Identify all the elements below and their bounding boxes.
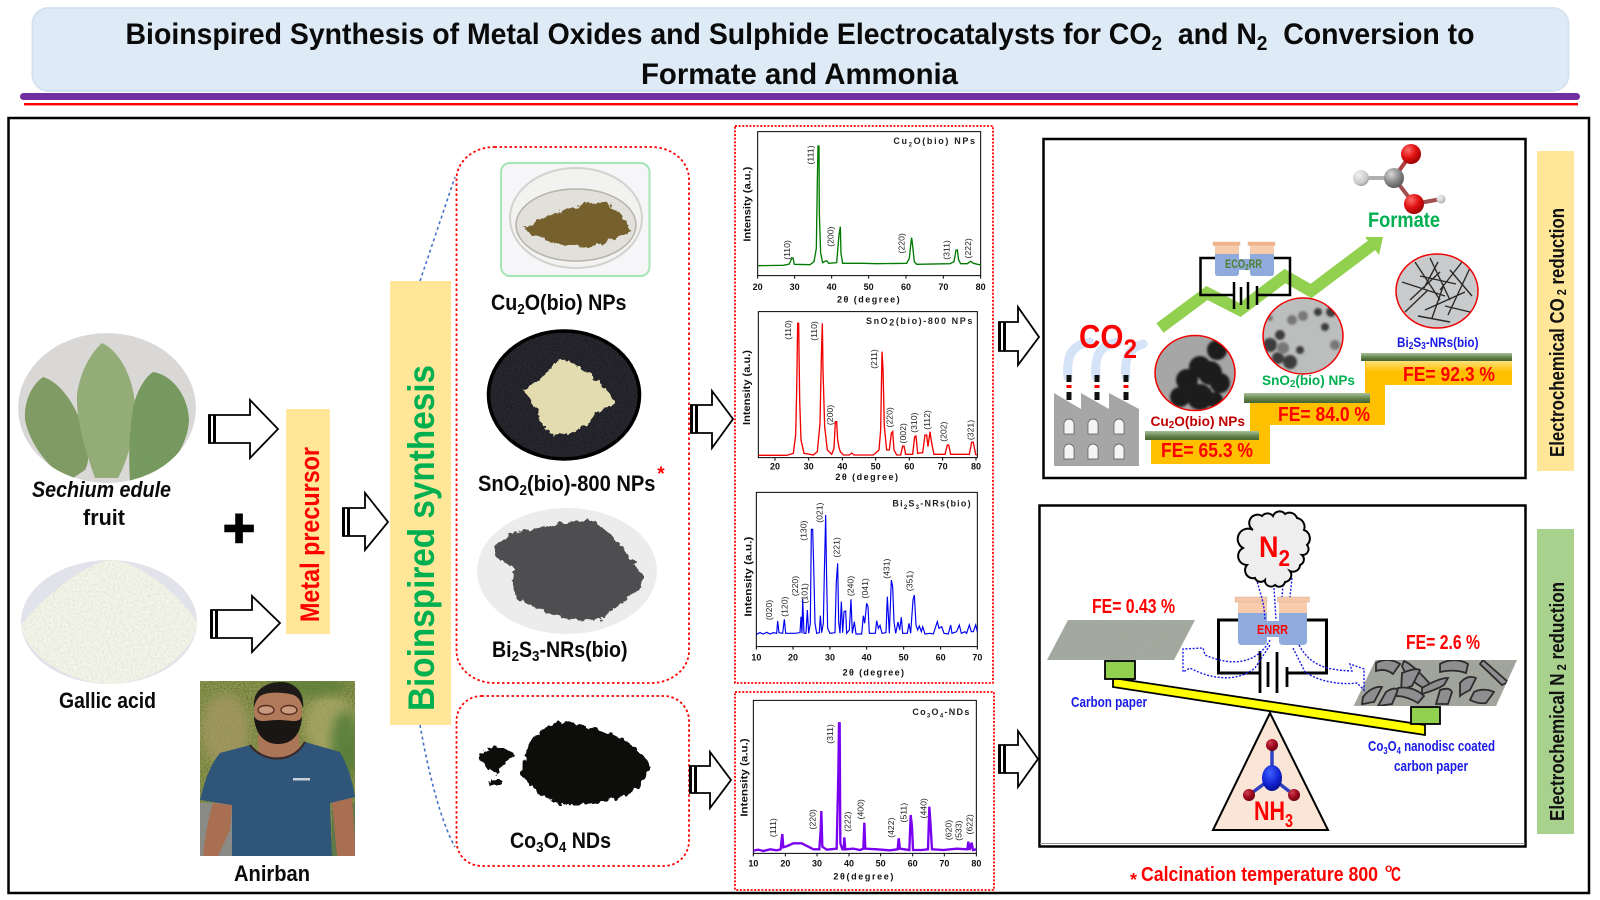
x axis title: 2θ (degree) bbox=[837, 294, 900, 304]
peak labels: (511) bbox=[899, 803, 909, 822]
arrow: rising green zigzag bbox=[1160, 237, 1383, 328]
label: Co3O4 NDs: O bbox=[544, 828, 559, 853]
plus sign: + bbox=[222, 496, 254, 559]
peak labels: (321) bbox=[966, 420, 976, 440]
arrow: precursor to synthesis bbox=[343, 493, 388, 550]
chart: Bi2S3 XRD bbox=[744, 492, 982, 678]
arrow: XRD to N2 reduction bbox=[999, 731, 1038, 787]
peak labels: (221) bbox=[832, 537, 842, 557]
label: Bi2S3-NRs(bio): 3 bbox=[532, 648, 539, 665]
TEM image: Cu2O bbox=[1154, 334, 1236, 412]
peak labels: (240) bbox=[845, 576, 855, 596]
footnote: calcination temperature: o bbox=[1385, 861, 1392, 875]
x tick labels: 30 bbox=[812, 859, 822, 869]
x tick labels: 30 bbox=[825, 653, 835, 663]
molecule: formate bbox=[1353, 144, 1446, 214]
peak labels: (311) bbox=[825, 724, 835, 744]
label: Sechium edule: Sechium edule bbox=[32, 477, 171, 502]
side label: Electrochemical N2 reduction bbox=[1537, 529, 1574, 834]
label: Bi2S3-NRs(bio): Bi bbox=[492, 637, 514, 662]
label: CO2: CO bbox=[1079, 318, 1128, 355]
peak labels: (220) bbox=[885, 407, 895, 427]
arrow: gallic acid to precursor bbox=[211, 596, 280, 652]
arrow: XRD to CO2 reduction bbox=[999, 307, 1039, 365]
peak labels: (130) bbox=[798, 520, 808, 541]
x tick labels bbox=[770, 461, 981, 471]
peak labels: (112) bbox=[922, 410, 932, 430]
peak labels: (120) bbox=[780, 596, 790, 617]
chart title: 3 bbox=[927, 713, 931, 719]
image: Bi2S3 powder bbox=[477, 508, 657, 634]
x tick labels: 70 bbox=[938, 282, 948, 292]
label: Co3O4 NDs: 3 bbox=[536, 839, 544, 856]
image: Sechium edule fruit bbox=[18, 333, 196, 483]
peak labels: (200) bbox=[826, 226, 836, 247]
image: Co3O4 nanodisc coated carbon paper bbox=[1354, 660, 1517, 706]
label: Bi2S3-NRs(bio) blue: Bi bbox=[1397, 334, 1411, 350]
label: Co3O4 nanodisc coated carbon paper: 4 bbox=[1397, 746, 1401, 757]
label: NH3: NH bbox=[1254, 796, 1293, 826]
side label: Electrochemical CO2 reduction bbox=[1537, 151, 1574, 471]
peak labels: (220) bbox=[790, 576, 800, 596]
x tick labels: 40 bbox=[844, 859, 854, 869]
chart title: (bio)-800 NPs bbox=[896, 316, 972, 326]
x tick labels: 30 bbox=[804, 461, 814, 471]
x axis title: 2θ (degree) bbox=[835, 472, 898, 482]
label: SnO2(bio)-800 NPs: (bio)-800 NPs bbox=[527, 471, 656, 496]
box: Bioinspired synthesis bbox=[390, 281, 451, 725]
peak labels: (620) bbox=[943, 820, 953, 840]
label: Co3O4 nanodisc coated carbon paper: 3 bbox=[1383, 746, 1388, 757]
title line 2: Formate and Ammonia bbox=[641, 58, 958, 91]
connector: dotted lines to material panels bbox=[420, 177, 455, 847]
y axis label: Intensity (a.u.) bbox=[740, 738, 751, 817]
peak labels: (041) bbox=[860, 578, 870, 598]
label: Cu2O(bio) NPs red: Cu bbox=[1150, 413, 1169, 429]
marker: red asterisk: * bbox=[657, 464, 665, 485]
label: Bi2S3-NRs(bio): 2 bbox=[512, 648, 519, 665]
x tick labels: 70 bbox=[939, 859, 949, 869]
y axis label: Intensity (a.u.) bbox=[742, 350, 753, 425]
box: Metal precursor: Metal precursor bbox=[295, 447, 325, 622]
label: Bi2S3-NRs(bio): -NRs(bio) bbox=[539, 637, 628, 662]
peak labels: (440) bbox=[918, 798, 928, 818]
label: Co3O4 NDs: NDs bbox=[566, 828, 611, 853]
panel: N2 electroreduction bbox=[1040, 506, 1526, 846]
x tick labels: 50 bbox=[864, 282, 874, 292]
x tick labels: 80 bbox=[971, 859, 981, 869]
footnote: calcination temperature: C bbox=[1391, 864, 1401, 886]
panel: CO2 electroreduction bbox=[1044, 139, 1526, 478]
panel: XRD chart Co3O4 frame bbox=[735, 692, 994, 890]
chart title: 2 bbox=[889, 318, 894, 328]
panel: XRD charts group bbox=[735, 126, 993, 683]
x axis title: 2θ(degree) bbox=[833, 871, 893, 881]
label: Gallic acid: Gallic acid bbox=[59, 688, 156, 713]
chart title: Bi bbox=[892, 499, 903, 509]
label: Co3O4 NDs: 4 bbox=[559, 839, 567, 856]
panel: Co3O4 nanodiscs bbox=[456, 696, 689, 866]
side label: Electrochemical N2 reduction: Electrochemical N bbox=[1547, 648, 1569, 821]
label: NH3: 3 bbox=[1285, 811, 1293, 831]
label: ECO2RR: RR bbox=[1249, 257, 1262, 271]
label: FE 84.0 %: FE= 84.0 % bbox=[1278, 404, 1370, 426]
peak labels: (111) bbox=[768, 818, 778, 837]
side label: Electrochemical N2 reduction: reduction bbox=[1547, 582, 1569, 664]
TEM image: Bi2S3 bbox=[1395, 252, 1481, 330]
peak labels: (311) bbox=[941, 240, 951, 260]
peak labels: (220) bbox=[808, 809, 818, 829]
chart title: 4 bbox=[940, 713, 944, 719]
label: Co3O4 nanodisc coated carbon paper: O bbox=[1388, 738, 1397, 755]
peak labels: (200) bbox=[825, 405, 835, 425]
arrow: nanoparticles to XRD bbox=[691, 391, 733, 448]
x tick labels: 70 bbox=[938, 461, 948, 471]
label: Co3O4 nanodisc coated carbon paper: Co bbox=[1368, 738, 1388, 755]
peak labels: (020) bbox=[764, 600, 774, 620]
photo: Anirban bbox=[200, 676, 359, 856]
chart title: SnO bbox=[866, 316, 888, 326]
x tick labels: 20 bbox=[753, 282, 763, 292]
x tick labels: 50 bbox=[871, 461, 881, 471]
peak labels: (211) bbox=[869, 349, 879, 369]
chart title: -NDs bbox=[944, 707, 969, 717]
peak labels: (220) bbox=[896, 233, 906, 253]
image: Co3O4 powder bbox=[480, 722, 649, 805]
label: Bi2S3-NRs(bio): S bbox=[519, 637, 532, 662]
label: FE 92.3 %: FE= 92.3 % bbox=[1403, 364, 1495, 386]
peak labels: (351) bbox=[905, 571, 915, 591]
label: Co3O4 nanodisc coated carbon paper bbox=[1368, 738, 1495, 775]
label: ECO2RR: ECO bbox=[1225, 257, 1251, 271]
label: Bi2S3-NRs(bio) blue: 3 bbox=[1421, 341, 1426, 352]
peak labels: (222) bbox=[963, 238, 973, 258]
electrochemical cell: ENRR bbox=[1218, 597, 1326, 693]
label: Cu2O(bio) NPs red: 2 bbox=[1169, 420, 1175, 431]
box: Bioinspired synthesis: Bioinspired synthesis bbox=[401, 365, 442, 711]
image: Cu2O powder dish bbox=[501, 163, 650, 276]
chart title: Cu bbox=[893, 136, 907, 146]
arrow: Co3O4 to XRD bbox=[690, 752, 731, 808]
x tick labels: 40 bbox=[837, 461, 847, 471]
steps: faradaic efficiency staircase bbox=[1145, 353, 1512, 464]
molecule: NH3 bbox=[1243, 739, 1300, 801]
label: Co3O4 NDs: Co bbox=[510, 828, 539, 853]
label: fruit: fruit bbox=[83, 505, 126, 530]
x tick labels: 20 bbox=[770, 461, 780, 471]
label: SnO2(bio) NPs green: (bio) NPs bbox=[1295, 372, 1355, 388]
smoke plumes bbox=[1068, 342, 1143, 377]
chart: SnO2 XRD bbox=[742, 312, 981, 482]
peak labels: (110) bbox=[783, 320, 793, 340]
side label: Electrochemical N2 reduction: 2 bbox=[1554, 664, 1569, 673]
x tick labels: 80 bbox=[971, 461, 981, 471]
label: Anirban: Anirban bbox=[234, 861, 310, 886]
side label: Electrochemical CO2 reduction: Electrochemical CO bbox=[1547, 268, 1569, 457]
peak labels: (021) bbox=[814, 502, 824, 523]
label: FE 65.3 %: FE= 65.3 % bbox=[1161, 440, 1253, 462]
label: SnO2(bio) NPs green: SnO bbox=[1262, 372, 1291, 388]
label: Bi2S3-NRs(bio) blue: S bbox=[1413, 334, 1421, 350]
peak labels: (622) bbox=[965, 814, 975, 834]
chart title: O bbox=[932, 707, 939, 717]
x tick labels: 60 bbox=[908, 859, 918, 869]
label: SnO2(bio) NPs green: 2 bbox=[1290, 379, 1296, 390]
chart title: 2 bbox=[909, 142, 913, 148]
x tick labels: 40 bbox=[862, 653, 872, 663]
x tick labels: 20 bbox=[788, 653, 798, 663]
x axis title: 2θ (degree) bbox=[843, 668, 904, 678]
panel: biosynthesised nanoparticles bbox=[456, 147, 689, 683]
x tick labels: 40 bbox=[827, 282, 837, 292]
x tick labels: 20 bbox=[780, 859, 790, 869]
label: Cu2O(bio) NPs: Cu bbox=[491, 290, 520, 315]
side label: Electrochemical CO2 reduction: reduction bbox=[1547, 208, 1569, 289]
electrode: right green block bbox=[1411, 707, 1440, 724]
label: Cu2O(bio) NPs: O(bio) NPs bbox=[525, 290, 626, 315]
peak labels: (110) bbox=[782, 240, 792, 260]
arrows: dotted nitrogen flow bbox=[1183, 575, 1364, 690]
peak labels: (002) bbox=[898, 423, 908, 443]
x tick labels: 80 bbox=[976, 282, 986, 292]
chart title: Co bbox=[912, 707, 926, 717]
peak labels: (202) bbox=[939, 421, 949, 442]
x tick labels: 10 bbox=[751, 653, 761, 663]
chart title: O(bio) NPs bbox=[914, 136, 975, 146]
icon: N2 cloud bbox=[1238, 511, 1310, 587]
title line 1: 2 bbox=[1151, 33, 1162, 55]
peak labels: (533) bbox=[954, 820, 964, 841]
label: Carbon paper: Carbon paper bbox=[1071, 694, 1147, 711]
peak labels: (222) bbox=[842, 811, 852, 832]
arrow: fruit to precursor bbox=[209, 400, 278, 458]
x tick labels: 10 bbox=[748, 859, 758, 869]
peak labels: (422) bbox=[886, 817, 896, 838]
label: N2: 2 bbox=[1278, 545, 1290, 571]
peak labels: (111) bbox=[806, 145, 816, 164]
label: N2: N bbox=[1259, 531, 1281, 564]
icon: factory bbox=[1054, 375, 1139, 466]
y axis label: Intensity (a.u.) bbox=[743, 167, 754, 242]
peak labels bbox=[768, 724, 975, 841]
chart: Co3O4 XRD bbox=[740, 700, 981, 881]
label: SnO2(bio)-800 NPs: SnO bbox=[478, 471, 523, 496]
footnote: calcination temperature: Calcination temperature 800 bbox=[1141, 864, 1378, 886]
x tick labels: 60 bbox=[936, 653, 946, 663]
peak labels bbox=[782, 145, 973, 260]
peak labels bbox=[764, 502, 915, 620]
label: Bi2S3-NRs(bio) blue: -NRs(bio) bbox=[1426, 334, 1478, 350]
image: Gallic acid powder bbox=[21, 560, 197, 684]
label: Bi2S3-NRs(bio) blue: 2 bbox=[1409, 341, 1414, 352]
x tick labels: 50 bbox=[876, 859, 886, 869]
title line 1: Conversion to bbox=[1267, 18, 1474, 51]
x tick labels bbox=[753, 282, 986, 292]
label: FE 0.43 %: FE= 0.43 % bbox=[1092, 596, 1175, 618]
label: Cu2O(bio) NPs red: O(bio) NPs bbox=[1174, 413, 1245, 429]
label: SnO2(bio)-800 NPs: 2 bbox=[519, 482, 527, 499]
chart title: 3 bbox=[916, 505, 920, 511]
title line 1: 2 bbox=[1257, 33, 1267, 55]
peak labels: (310) bbox=[909, 412, 919, 433]
title line 1: and N bbox=[1162, 18, 1257, 51]
label: ENRR: ENRR bbox=[1257, 622, 1289, 637]
x tick labels bbox=[751, 653, 982, 663]
x tick labels bbox=[748, 859, 981, 869]
balance beam bbox=[1113, 678, 1425, 735]
peak labels: (101) bbox=[799, 583, 809, 603]
electrochemical cell: ECO2RR bbox=[1200, 242, 1290, 309]
peak labels bbox=[783, 320, 976, 443]
peak labels: (400) bbox=[856, 799, 866, 819]
chart: Cu2O XRD bbox=[743, 132, 986, 304]
footnote: calcination temperature: * bbox=[1130, 870, 1137, 890]
label: Cu2O(bio) NPs: 2 bbox=[517, 301, 525, 318]
label: ECO2RR: 2 bbox=[1245, 263, 1249, 272]
label: Formate: Formate bbox=[1368, 209, 1440, 232]
label: FE 2.6 %: FE= 2.6 % bbox=[1406, 632, 1480, 654]
x tick labels: 70 bbox=[972, 653, 982, 663]
x tick labels: 60 bbox=[904, 461, 914, 471]
y axis label: Intensity (a.u.) bbox=[744, 537, 755, 617]
TEM image: SnO2 bbox=[1260, 296, 1346, 378]
image: SnO2 powder bbox=[488, 331, 640, 459]
x tick labels: 30 bbox=[790, 282, 800, 292]
chart title: 2 bbox=[904, 505, 908, 511]
triangle: NH3 fulcrum bbox=[1213, 713, 1328, 830]
label: Co3O4 nanodisc coated carbon paper: carbon paper bbox=[1394, 758, 1468, 775]
peak labels: (110) bbox=[809, 321, 819, 341]
label: CO2: 2 bbox=[1123, 334, 1137, 364]
chart title: S bbox=[908, 499, 914, 509]
label: Co3O4 nanodisc coated carbon paper: nanodisc coated bbox=[1401, 738, 1495, 755]
electrode: left green block bbox=[1105, 661, 1135, 679]
box: Metal precursor bbox=[286, 409, 330, 634]
side label: Electrochemical CO2 reduction: 2 bbox=[1554, 289, 1569, 298]
title banner bbox=[32, 8, 1568, 91]
peak labels: (431) bbox=[881, 558, 891, 579]
x tick labels: 50 bbox=[899, 653, 909, 663]
chart title: -NRs(bio) bbox=[920, 499, 971, 509]
title line 1: Bioinspired Synthesis of Metal Oxides and Sulphide Electrocatalysts for CO bbox=[126, 18, 1207, 51]
image: carbon paper bbox=[1047, 620, 1195, 660]
x tick labels: 60 bbox=[901, 282, 911, 292]
